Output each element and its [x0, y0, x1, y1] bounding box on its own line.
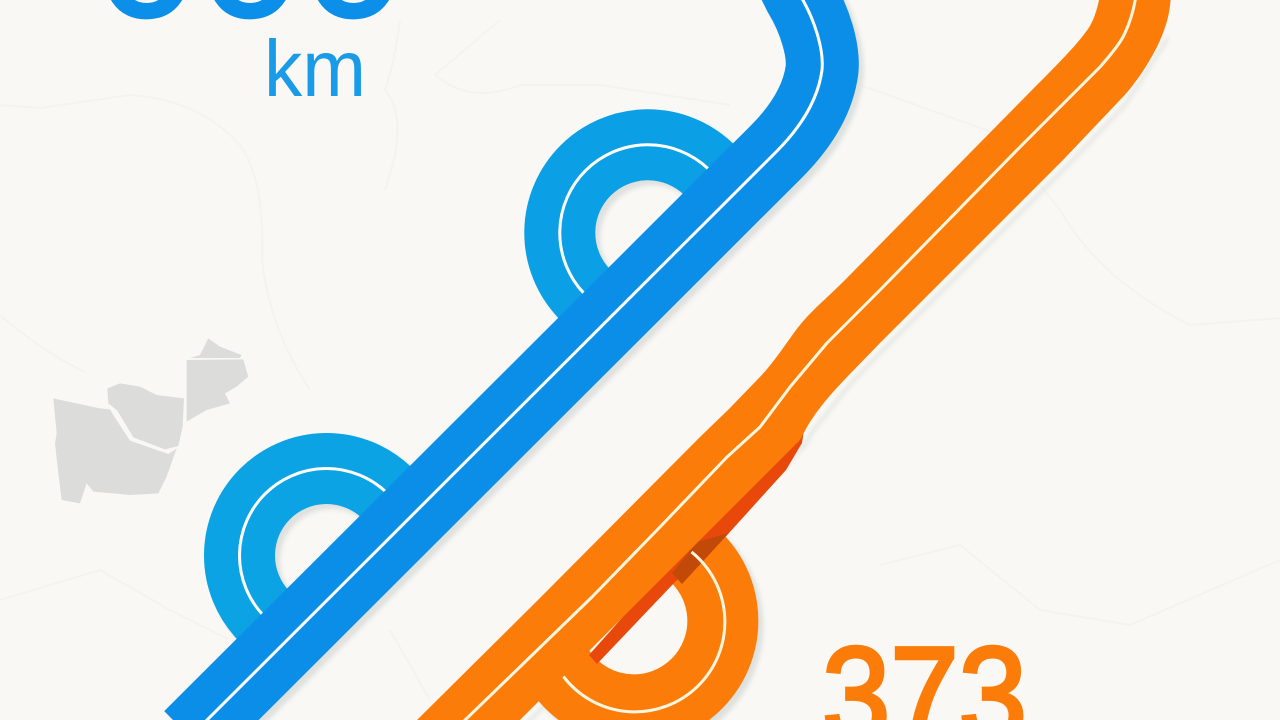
- dark crossing band: [672, 533, 729, 584]
- upper blue loop: [560, 145, 718, 303]
- main blue road: [190, 0, 822, 720]
- red underside strip: [589, 430, 804, 664]
- loop centre line: [563, 552, 725, 712]
- blue road centre line: [190, 0, 822, 720]
- orange road with loop: [415, 0, 1171, 720]
- main orange road: [415, 0, 1171, 720]
- road shadows: [195, 0, 1168, 720]
- blue unit label: km: [264, 24, 366, 113]
- icon: grey region map: [53, 338, 248, 503]
- blue road with loops: [190, 0, 822, 720]
- orange road centre line: [463, 0, 1136, 720]
- lower blue loop: [239, 468, 396, 626]
- orange loop: [556, 543, 723, 710]
